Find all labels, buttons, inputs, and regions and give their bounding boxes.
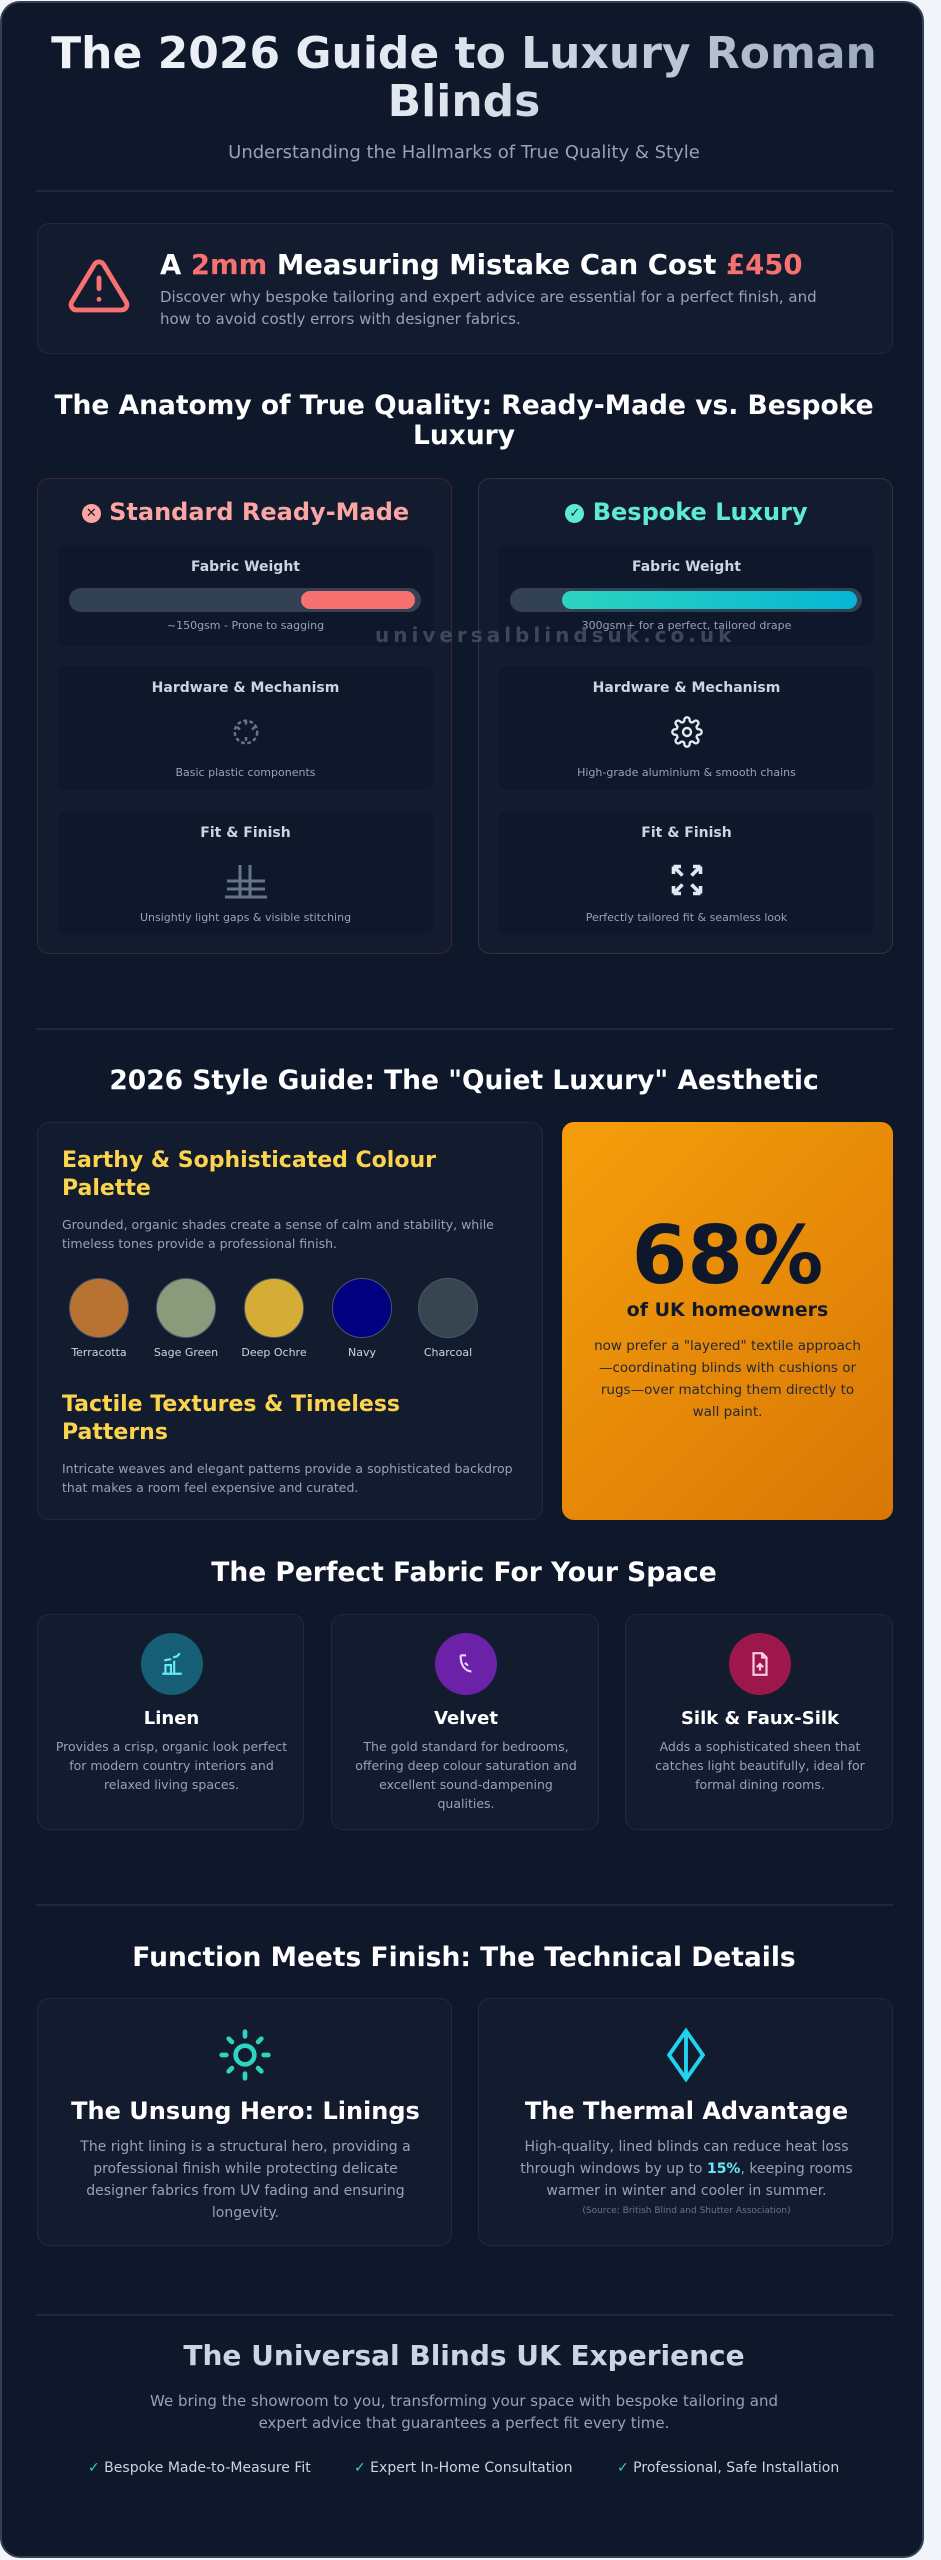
fabric weight box: Fabric Weight [632, 559, 741, 575]
panel heading: ✕ [86, 506, 97, 521]
stat callout: 68%: 68% [632, 1209, 823, 1302]
title: Blinds [388, 76, 540, 127]
textures heading [62, 1392, 400, 1445]
stat callout: 68%: rugs—over matching them directly to [601, 1382, 854, 1398]
alert text: Discover why bespoke tailoring and expert advice are essential for a perfect finish, and how to avoid costly errors with designer fabrics. [160, 288, 817, 328]
card: velvet: Velvet [434, 1708, 498, 1729]
fit & finish box: Perfectly tailored fit & seamless look [586, 911, 787, 924]
fabric weight box: Fabric Weight [191, 559, 300, 575]
colour swatches: Navy [348, 1346, 376, 1359]
stat callout: 68%: —coordinating blinds with cushions or [599, 1360, 856, 1376]
card: thermal [478, 1998, 893, 2246]
card: silk: Adds a sophisticated sheen that catches light beautifully, ideal for formal dining rooms. [655, 1739, 865, 1792]
hardware box: Hardware & Mechanism [593, 680, 780, 696]
icon: warning triangle [68, 260, 130, 312]
feature checklist: ✓ Professional, Safe Installation [617, 2460, 839, 2476]
hardware box: Basic plastic components [175, 766, 316, 779]
title [2, 30, 926, 126]
fit & finish box: Unsightly light gaps & visible stitching [140, 911, 351, 924]
fit & finish box: Fit & Finish [641, 825, 732, 841]
palette heading: Earthy & Sophisticated Colour [62, 1148, 436, 1173]
title: The 2026 Guide to Luxury Roman [51, 28, 877, 79]
hardware box: Hardware & Mechanism [152, 680, 339, 696]
textures heading: Patterns [62, 1420, 168, 1445]
subtitle: Understanding the Hallmarks of True Quality & Style [228, 142, 700, 163]
fit & finish box [58, 811, 433, 935]
card: silk: Silk & Faux-Silk [681, 1708, 839, 1729]
heading: anatomy: Luxury [413, 420, 515, 451]
experience text: We bring the showroom to you, transforming your space with bespoke tailoring and expert advice that guarantees a perfect fit every time. [150, 2392, 778, 2432]
card: linings: The right lining is a structural hero, providing a professional finish while protecting delicate designer fabrics from UV fading and ensuring longevity. [80, 2139, 411, 2221]
panel: colour palette: Grounded, organic shades create a sense of calm and stability, while timeless tones provide a professional finish. [62, 1217, 494, 1251]
fabric weight box [58, 545, 433, 646]
hardware box [499, 666, 874, 790]
stat callout: 68% [562, 1122, 893, 1520]
heading: fabrics: The Perfect Fabric For Your Space [211, 1557, 717, 1588]
panel: bespoke luxury: ✓ [569, 506, 580, 521]
fit & finish box [499, 811, 874, 935]
textures heading: Tactile Textures & Timeless [62, 1392, 400, 1417]
panel: colour palette [37, 1122, 543, 1520]
panel: standard ready-made [37, 478, 452, 954]
stat callout: 68%: of UK homeowners [627, 1299, 828, 1321]
heading: technical: Function Meets Finish: The Technical Details [132, 1942, 796, 1973]
card: silk [625, 1614, 893, 1830]
colour swatches: Charcoal [424, 1346, 472, 1359]
card: linen: Linen [144, 1708, 199, 1729]
alert heading: A 2mm Measuring Mistake Can Cost £450 [160, 249, 802, 281]
card: thermal: High-quality, lined blinds can reduce heat loss through windows by up to 15%, keeping rooms warmer in winter and cooler in summer. [520, 2139, 853, 2199]
card: linen [37, 1614, 304, 1830]
fabric weight box: 300gsm+ for a perfect, tailored drape [582, 619, 791, 632]
card: thermal: (Source: British Blind and Shutter Association) [582, 2206, 791, 2216]
feature checklist: ✓ Expert In-Home Consultation [354, 2460, 573, 2476]
panel: bespoke luxury [478, 478, 893, 954]
palette heading [62, 1148, 436, 1201]
stat callout: 68%: wall paint. [693, 1404, 762, 1420]
feature checklist [88, 2460, 839, 2476]
heading: experience: The Universal Blinds UK Experience [183, 2339, 745, 2372]
panel: colour palette: Intricate weaves and elegant patterns provide a sophisticated backdrop that makes a room feel expensive and curated. [62, 1461, 513, 1495]
colour swatches [69, 1278, 478, 1359]
heading: anatomy [54, 390, 874, 451]
stat callout: 68%: now prefer a "layered" textile approach [594, 1338, 861, 1354]
colour swatches: Sage Green [154, 1346, 218, 1359]
colour swatches: Deep Ochre [241, 1346, 307, 1359]
card: velvet: The gold standard for bedrooms, offering deep colour saturation and excellent sound-dampening qualities. [355, 1739, 577, 1811]
heading: style guide: 2026 Style Guide: The "Quiet Luxury" Aesthetic [109, 1065, 819, 1096]
card: linings: The Unsung Hero: Linings [71, 2097, 420, 2125]
fabric weight box [499, 545, 874, 646]
fit & finish box: Fit & Finish [200, 825, 291, 841]
hardware box [58, 666, 433, 790]
hardware box: High-grade aluminium & smooth chains [577, 766, 796, 779]
card: linings [37, 1998, 452, 2246]
palette heading: Palette [62, 1176, 151, 1201]
panel: bespoke luxury: Bespoke Luxury [593, 498, 808, 526]
watermark: universalblindsuk.co.uk [375, 623, 735, 647]
fabric weight box: ~150gsm - Prone to sagging [167, 619, 324, 632]
card: linen: Provides a crisp, organic look perfect for modern country interiors and relaxed living spaces. [56, 1739, 287, 1792]
card: velvet [331, 1614, 599, 1830]
card: thermal: The Thermal Advantage [525, 2097, 848, 2125]
feature checklist: ✓ Bespoke Made-to-Measure Fit [88, 2460, 311, 2476]
panel heading: Standard Ready-Made [109, 498, 409, 526]
heading: anatomy: The Anatomy of True Quality: Ready-Made vs. Bespoke [54, 390, 874, 421]
alert panel [37, 223, 893, 354]
colour swatches: Terracotta [71, 1346, 127, 1359]
